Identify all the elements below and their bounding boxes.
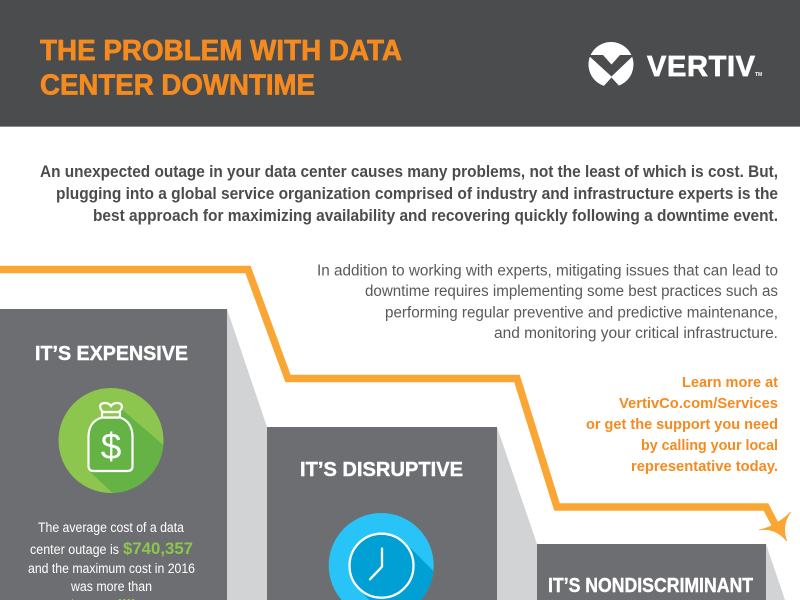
call to action: Learn more at xyxy=(682,374,778,391)
call to action: representative today. xyxy=(631,458,778,475)
icon: money bag xyxy=(58,388,164,493)
trademark: TM xyxy=(755,72,762,78)
call to action: VertivCo.com/Services xyxy=(619,395,778,412)
title xyxy=(40,35,402,102)
panel: it's disruptive xyxy=(267,427,497,600)
outage cost text: and the maximum cost in 2016 xyxy=(28,561,195,576)
outage cost text xyxy=(28,520,195,600)
outage cost text: $740,357 xyxy=(123,539,193,558)
best practices paragraph xyxy=(317,262,778,342)
arrow: descending staircase line xyxy=(0,270,791,541)
call to action xyxy=(586,374,778,475)
panel shadows xyxy=(227,309,785,600)
best practices paragraph: and monitoring your critical infrastructure. xyxy=(494,325,778,342)
call to action: or get the support you need xyxy=(586,416,778,433)
logo wordmark: VERTIV xyxy=(647,51,756,83)
call to action: by calling your local xyxy=(641,437,778,454)
icon: money bag: $ xyxy=(101,426,121,467)
best practices paragraph: In addition to working with experts, mitigating issues that can lead to xyxy=(317,262,778,280)
intro paragraph xyxy=(40,162,778,225)
logo: Vertiv xyxy=(588,42,762,89)
best practices paragraph: performing regular preventive and predictive maintenance, xyxy=(385,304,778,322)
panel: it's expensive xyxy=(0,309,227,600)
title: CENTER DOWNTIME xyxy=(40,70,315,102)
outage cost text: was more than xyxy=(70,579,152,594)
logo mark xyxy=(588,42,634,89)
best practices paragraph: downtime requires implementing some best practices such as xyxy=(365,283,778,300)
header band xyxy=(0,0,800,127)
panel: it's nondiscriminant xyxy=(537,544,766,600)
heading: it's disruptive: IT’S DISRUPTIVE xyxy=(300,459,463,481)
icon: clock xyxy=(329,513,445,600)
heading: it's expensive: IT’S EXPENSIVE xyxy=(35,343,188,365)
outage cost text: The average cost of a data xyxy=(38,520,184,535)
outage cost text: center outage is xyxy=(30,542,119,557)
heading: it's nondiscriminant: IT’S NONDISCRIMINANT xyxy=(548,575,753,597)
title: THE PROBLEM WITH DATA xyxy=(40,35,402,67)
